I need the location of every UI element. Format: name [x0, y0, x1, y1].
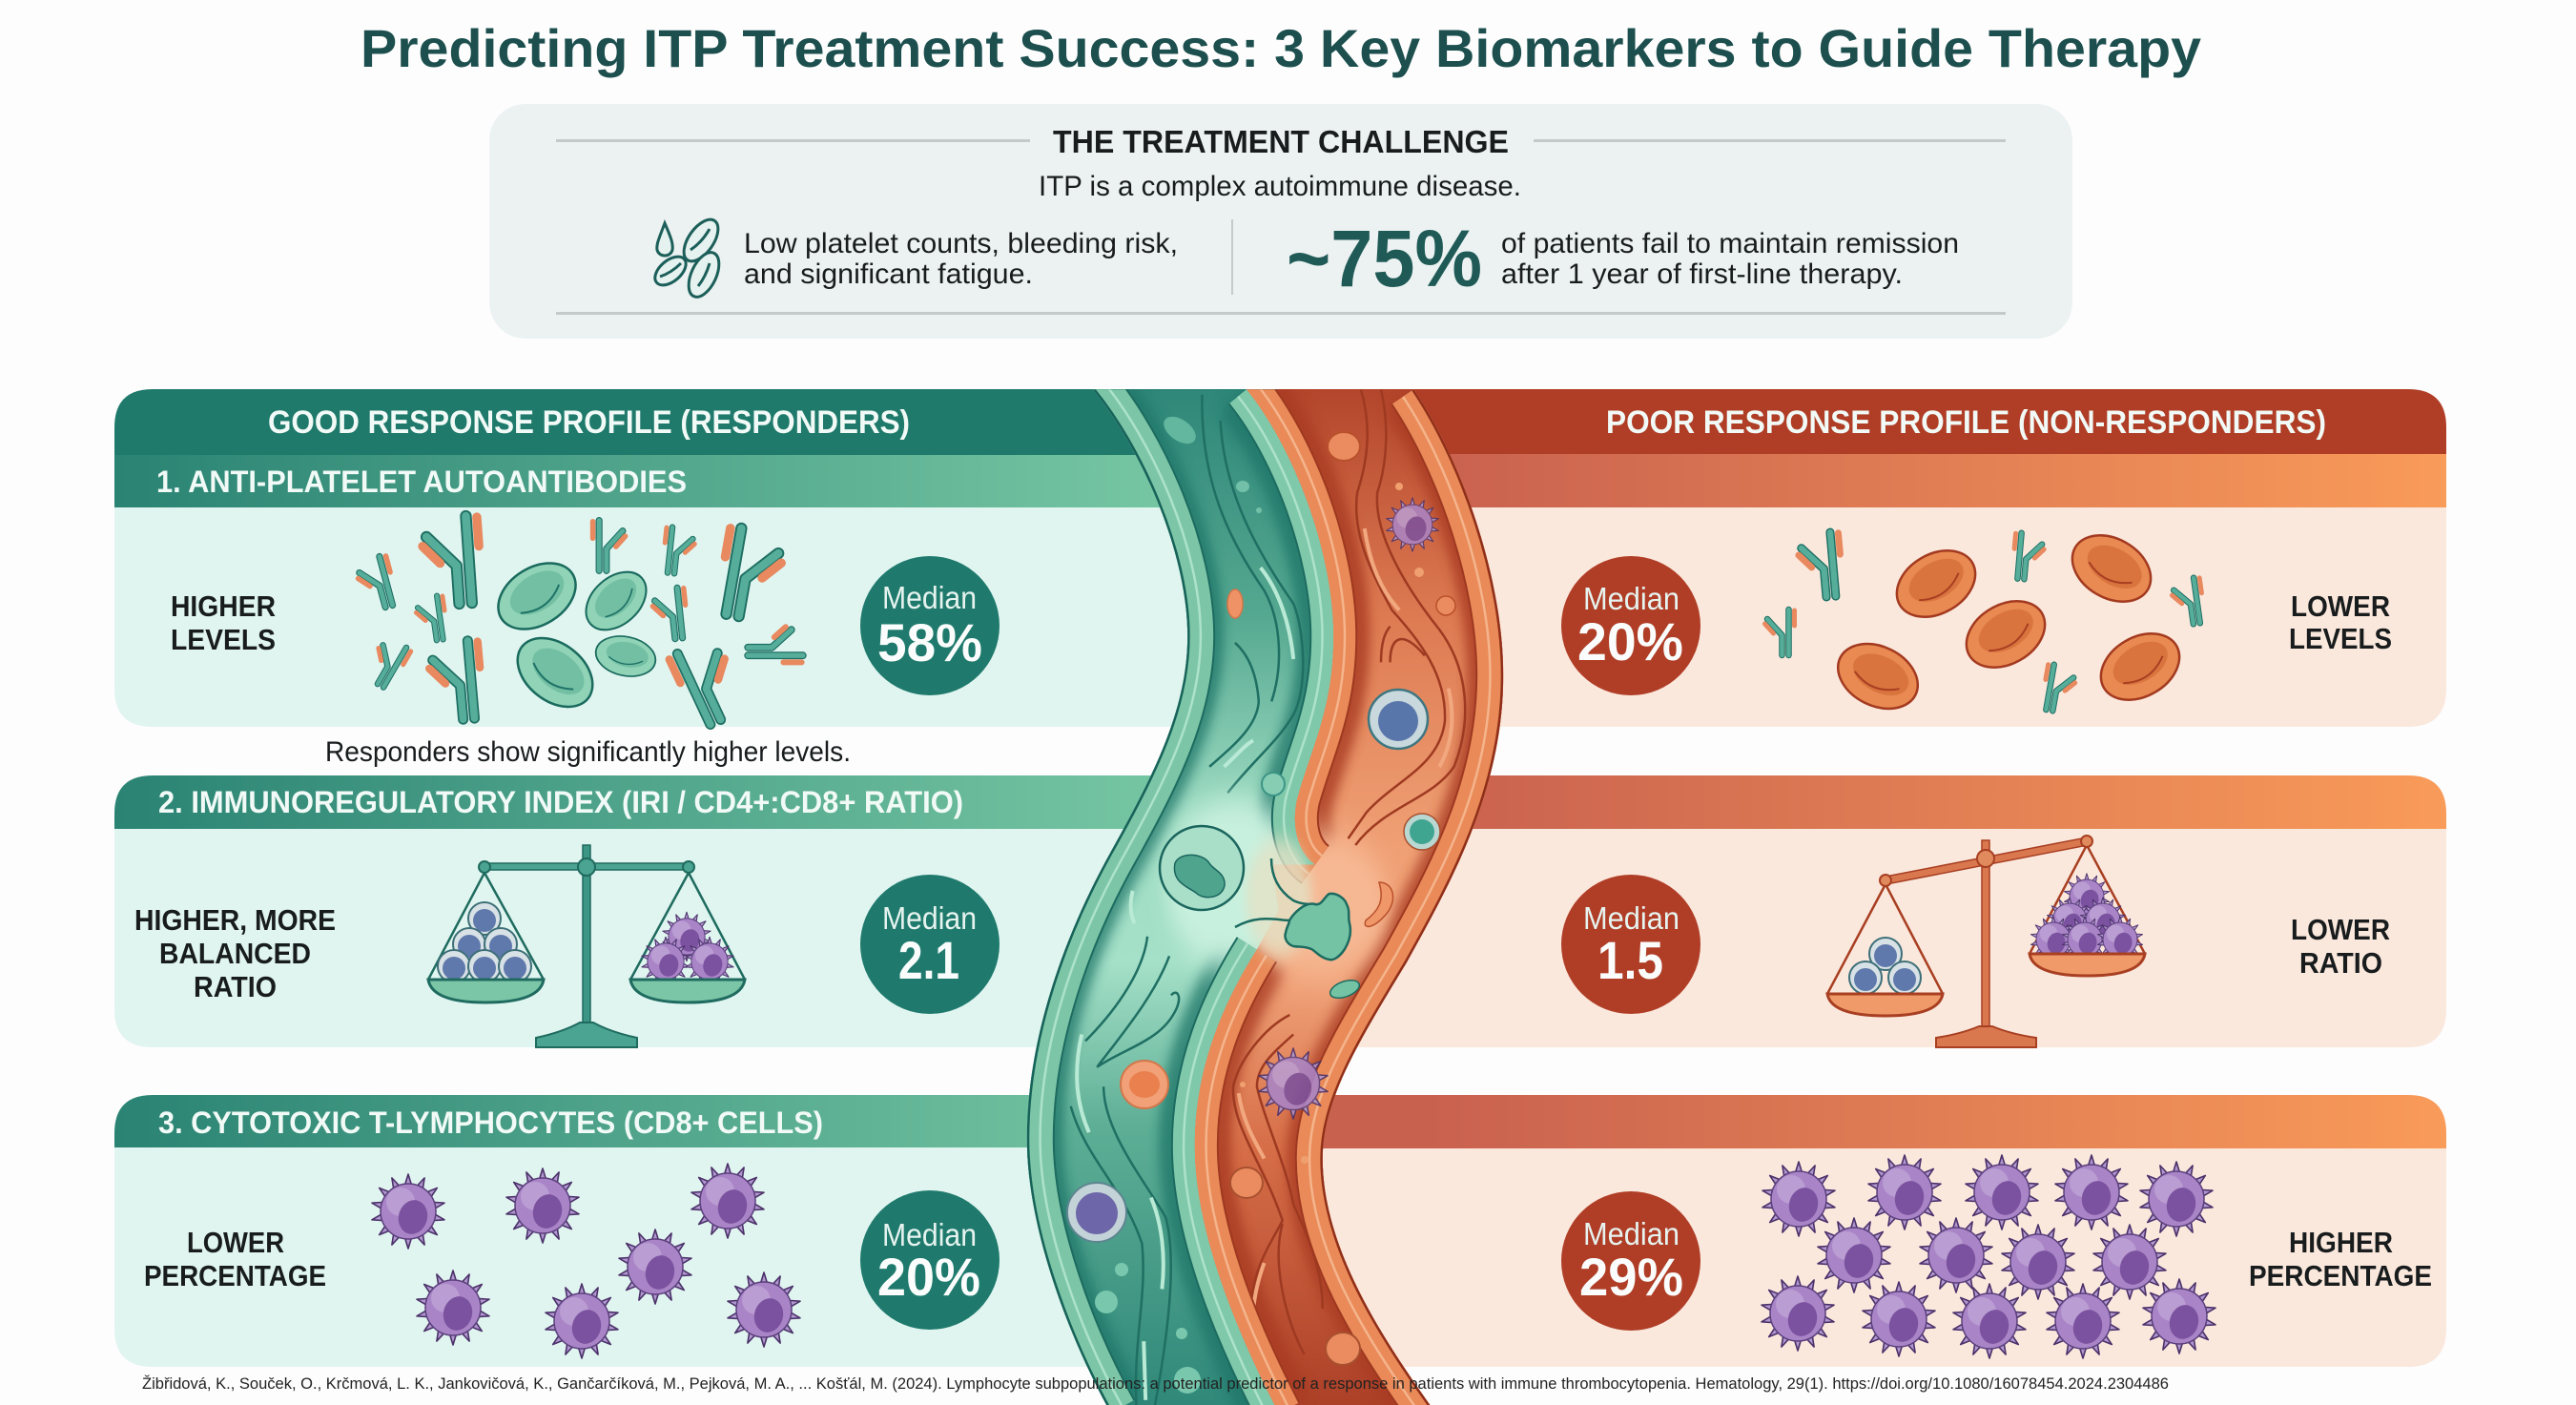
badge: median 2.1 — [860, 875, 999, 1014]
text: symptoms: and significant fatigue. — [744, 258, 1033, 290]
badge: median 20 percent — [860, 1190, 999, 1330]
badge: median 58 percent: Median — [882, 580, 977, 615]
label: lower percentage: PERCENTAGE — [144, 1259, 326, 1292]
panel: the treatment challenge — [489, 104, 2072, 339]
citation: Žibřidová, K., Souček, O., Krčmová, L. K., Jankovičová, K., Gančarčíková, M., Pejková, M. A., ... Košťál, M. (2024). Lymphocyte subpopulations: a potential predictor of a response in patients with immune thrombocytopenia. Hematology, 29(1). https://doi.org/10.1080/16078454.2024.2304486 — [142, 1374, 2169, 1393]
red vessel half — [1194, 389, 1503, 1405]
heading: anti-platelet autoantibodies: 1. ANTI-PLATELET AUTOANTIBODIES — [156, 465, 687, 499]
badge: median 2.1: Median — [882, 900, 977, 936]
badge: median 20 percent — [1561, 556, 1700, 695]
badge: median 58 percent — [860, 556, 999, 695]
badge: median 1.5: 1.5 — [1597, 930, 1663, 990]
badge: median 20 percent: 20% — [877, 1247, 980, 1307]
text: responders note: Responders show significantly higher levels. — [325, 736, 851, 768]
badge: median 29 percent — [1561, 1191, 1700, 1331]
label: higher percentage: PERCENTAGE — [2249, 1259, 2432, 1292]
illustration: few antibodies and platelets — [1764, 522, 2206, 721]
label: higher percentage: HIGHER — [2289, 1226, 2393, 1259]
text: remission failure: of patients fail to maintain remission — [1501, 228, 1959, 259]
badge: median 2.1: 2.1 — [898, 930, 959, 990]
illustration: central blood vessel — [1001, 382, 1513, 1405]
title: Predicting ITP Treatment Success: 3 Key Biomarkers to Guide Therapy — [361, 18, 2201, 78]
vessel cells: red side — [1230, 432, 1455, 1365]
label: higher percentage — [2249, 1226, 2432, 1292]
label: higher more balanced ratio: HIGHER, MORE — [134, 903, 336, 937]
label: lower levels — [2289, 589, 2392, 655]
badge: median 58 percent: 58% — [877, 612, 982, 672]
heading: good response profile: GOOD RESPONSE PROFILE (RESPONDERS) — [268, 404, 910, 441]
panel: non-responders biomarker 3 — [1278, 1095, 2446, 1367]
label: higher more balanced ratio — [134, 903, 336, 1003]
illustration: few cytotoxic cells — [371, 1164, 801, 1358]
heading: the treatment challenge: THE TREATMENT CHALLENGE — [1053, 124, 1509, 159]
stat: 75 percent: ~75% — [1287, 214, 1482, 303]
green vessel half — [1026, 389, 1333, 1405]
text: remission failure: after 1 year of first-line therapy. — [1501, 258, 1903, 290]
panel: responders biomarker 2 — [114, 775, 1278, 1047]
text: disease summary: ITP is a complex autoimmune disease. — [1039, 171, 1521, 202]
badge: median 1.5 — [1561, 875, 1700, 1014]
badge: median 1.5: Median — [1583, 900, 1680, 936]
panel: responders biomarker 3 — [114, 1095, 1278, 1367]
label: lower ratio: LOWER — [2291, 913, 2390, 946]
blood flow blend at the junction — [1246, 838, 1311, 956]
badge: median 29 percent: 29% — [1579, 1247, 1683, 1307]
label: lower ratio — [2291, 913, 2390, 980]
label: lower percentage — [144, 1226, 326, 1292]
panel: responders biomarker 1 — [114, 389, 1278, 729]
text: symptoms: Low platelet counts, bleeding risk, — [744, 228, 1178, 259]
vessel cells: green side — [1067, 411, 1285, 1394]
label: lower levels: LOWER — [2291, 589, 2390, 623]
text: remission failure — [1501, 228, 1959, 290]
badge: median 29 percent: Median — [1583, 1216, 1680, 1251]
label: higher levels: HIGHER — [171, 589, 276, 623]
badge: median 20 percent: 20% — [1577, 611, 1683, 672]
badge: median 20 percent: Median — [1583, 581, 1680, 616]
illustration: tipped scale — [1827, 836, 2145, 1047]
heading: cytotoxic t-lymphocytes: 3. CYTOTOXIC T-LYMPHOCYTES (CD8+ CELLS) — [158, 1105, 823, 1140]
illustration: many cytotoxic cells — [1761, 1155, 2216, 1358]
heading: poor response profile: POOR RESPONSE PROFILE (NON-RESPONDERS) — [1606, 404, 2326, 441]
label: lower ratio: RATIO — [2299, 946, 2382, 980]
label: higher levels: LEVELS — [171, 623, 276, 656]
illustration: balanced scale — [428, 845, 745, 1047]
panel: non-responders biomarker 1 — [1278, 389, 2446, 727]
label: lower levels: LEVELS — [2289, 622, 2392, 655]
label: lower percentage: LOWER — [187, 1226, 284, 1259]
label: higher levels — [171, 589, 276, 656]
badge: median 20 percent: Median — [882, 1217, 977, 1252]
heading: immunoregulatory index: 2. IMMUNOREGULATORY INDEX (IRI / CD4+:CD8+ RATIO) — [158, 785, 963, 819]
panel: non-responders biomarker 2 — [1278, 775, 2446, 1047]
illustration: many antibodies and platelets — [354, 515, 803, 729]
icon: platelets and drop — [649, 214, 725, 301]
label: higher more balanced ratio: RATIO — [194, 970, 277, 1003]
label: higher more balanced ratio: BALANCED — [159, 937, 311, 970]
text: symptoms — [744, 228, 1178, 290]
